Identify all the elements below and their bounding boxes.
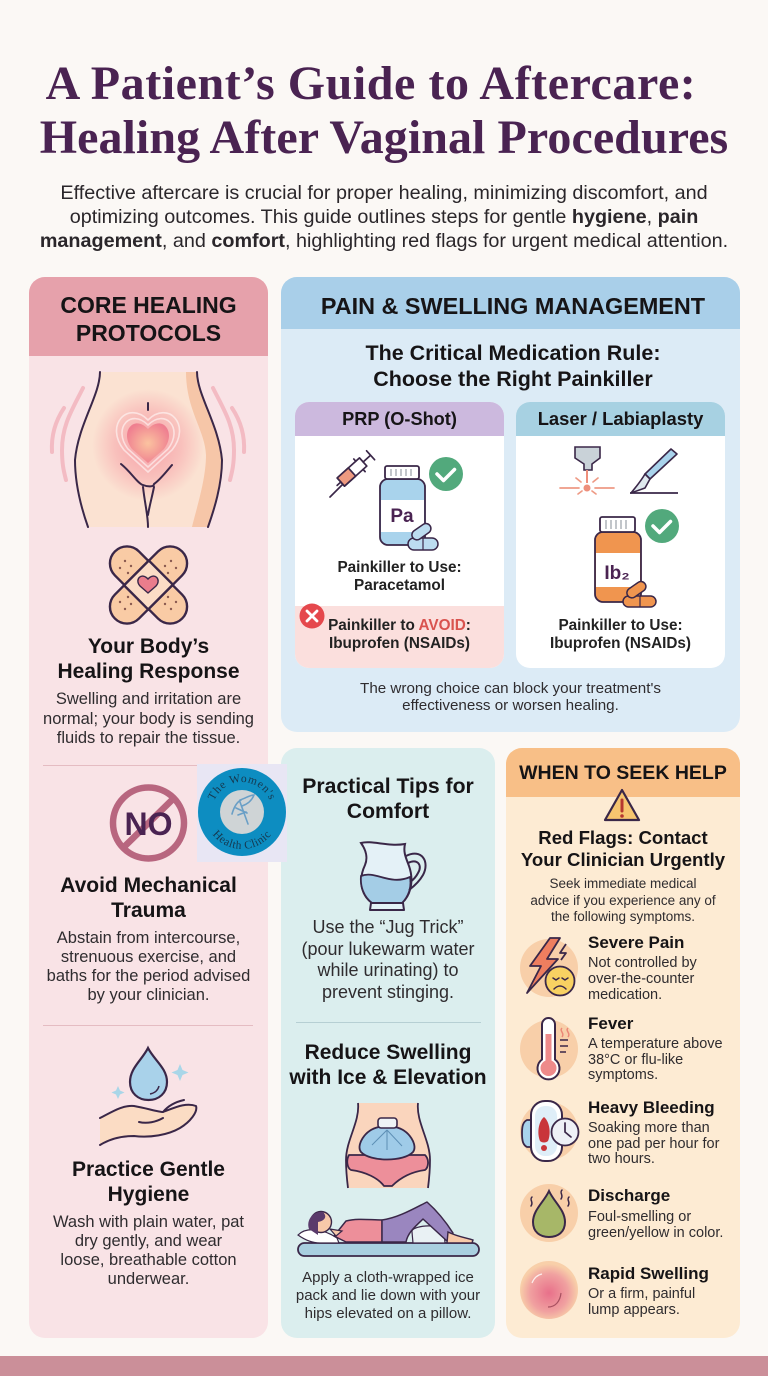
text: warning note: [360, 680, 661, 714]
icon: red cross: [300, 604, 324, 628]
heading: practice gentle hygiene: [72, 1158, 225, 1206]
heading: practical tips: Comfort: [347, 800, 429, 822]
text: seek immediate advice: Seek immediate medical: [549, 876, 697, 891]
item: heavy bleeding: [520, 1098, 580, 1164]
text: warning note: The wrong choice can block your treatment's: [360, 680, 661, 697]
text: discharge: [588, 1209, 723, 1241]
text: avoid trauma: Abstain from intercourse,: [57, 929, 240, 947]
icon: ibuprofen bottle: Ib₂: [604, 563, 630, 584]
heading: pain and swelling management: PAIN & SWELLING MANAGEMENT: [321, 293, 705, 319]
text: heavy bleeding: two hours.: [588, 1151, 655, 1167]
text: painkiller to use ibuprofen: Ibuprofen (NSAIDs): [550, 635, 691, 652]
item: rapid swelling: [520, 1261, 580, 1321]
text: avoid trauma: by your clinician.: [88, 986, 209, 1004]
text: severe pain: Not controlled by: [588, 955, 697, 971]
icon: paracetamol bottle: [379, 465, 439, 551]
text: severe pain: over-the-counter: [588, 971, 694, 987]
card: PRP: [295, 402, 504, 668]
text: severe pain: medication.: [588, 987, 662, 1003]
clinic logo: The Women's: [208, 774, 274, 800]
heading: severe pain: Severe Pain: [588, 933, 684, 952]
heading: your body's healing response: Healing Response: [57, 660, 240, 682]
text: jug trick: [301, 917, 475, 1002]
text: fever: 38°C or flu-like: [588, 1052, 683, 1068]
icon: scalpel: [630, 448, 678, 494]
heading: red flags: Your Clinician Urgently: [521, 849, 725, 870]
text: heavy bleeding: [588, 1121, 719, 1168]
heading: avoid mechanical trauma: [60, 874, 237, 922]
text: healing response: fluids to repair the tissue.: [57, 729, 240, 747]
text: discharge: Foul-smelling or: [588, 1209, 691, 1225]
text: seek immediate advice: advice if you experience any of: [530, 892, 716, 908]
footer bar: [0, 1356, 768, 1376]
text: heavy bleeding: one pad per hour for: [588, 1136, 719, 1152]
item: severe pain: [520, 937, 578, 997]
text: jug trick: prevent stinging.: [322, 982, 454, 1002]
text: jug trick: Use the “Jug Trick”: [312, 917, 464, 937]
text: painkiller to avoid: Painkiller to AVOID:: [328, 617, 471, 634]
heading: core healing protocols: PROTOCOLS: [76, 320, 221, 346]
text: healing response: normal; your body is sending: [43, 710, 254, 728]
heading: core healing protocols: [60, 292, 237, 346]
panel: pain and swelling management: [281, 277, 740, 732]
heading: critical medication rule: [365, 341, 661, 391]
heading: discharge: Discharge: [588, 1186, 670, 1205]
heading: practical tips: Practical Tips for: [302, 774, 474, 798]
item: fever: [520, 1017, 578, 1080]
icon: swollen lump: [520, 1261, 580, 1321]
text: seek immediate advice: the following symptoms.: [551, 909, 695, 924]
text: rapid swelling: Or a firm, painful: [588, 1286, 695, 1302]
heading: core healing protocols: CORE HEALING: [60, 292, 237, 318]
heading: practical tips: [302, 774, 474, 822]
icon: green check: [429, 457, 463, 491]
title: [40, 57, 728, 164]
icon: pad and clock: [520, 1098, 580, 1164]
icon: no sign: [110, 784, 188, 862]
icon: crossed bandages with heart: [108, 545, 188, 625]
text: seek immediate advice: [530, 876, 716, 924]
icon: lightning and sad face: [520, 937, 578, 997]
text: heavy bleeding: Soaking more than: [588, 1120, 710, 1136]
heading: rapid swelling: Rapid Swelling: [588, 1264, 709, 1283]
text: painkiller to avoid: Ibuprofen (NSAIDs): [329, 635, 470, 652]
heading: reduce swelling: [289, 1040, 487, 1088]
icon: ibuprofen bottle: [594, 516, 657, 608]
heading: your body's healing response: Your Body’s: [88, 634, 209, 658]
clinic logo: Health Clinic: [212, 830, 271, 849]
icon: laser: [559, 446, 615, 495]
text: ice and elevation: [296, 1269, 480, 1322]
heading: heavy bleeding: Heavy Bleeding: [588, 1098, 715, 1117]
heading: red flags: [521, 827, 725, 870]
intro text: optimizing outcomes. This guide outlines steps for gentle hygiene, pain: [70, 206, 698, 228]
icon: ice pack on abdomen: [345, 1102, 431, 1188]
text: fever: A temperature above: [588, 1036, 723, 1052]
clinic logo: [197, 764, 287, 862]
text: jug trick: while urinating) to: [317, 960, 459, 980]
heading: avoid mechanical trauma: Trauma: [111, 898, 186, 922]
icon: green check: [645, 509, 679, 543]
icon: thermometer: [520, 1018, 580, 1082]
text: warning note: effectiveness or worsen healing.: [402, 697, 619, 714]
icon: warning triangle: [604, 788, 640, 822]
text: painkiller to use paracetamol: Paracetamol: [354, 577, 445, 594]
heading: critical medication rule: Choose the Right Painkiller: [373, 367, 653, 391]
text: rapid swelling: [588, 1286, 695, 1318]
text: ice and elevation: Apply a cloth-wrapped ice: [302, 1269, 474, 1286]
heading: fever: Fever: [588, 1014, 633, 1033]
text: healing response: [43, 690, 254, 747]
icon: no sign: NO: [124, 806, 172, 842]
text: painkiller to use paracetamol: [337, 559, 462, 594]
heading: reduce swelling: Reduce Swelling: [305, 1040, 471, 1064]
heading: your body's healing response: [57, 634, 240, 682]
card: laser labiaplasty: [516, 402, 725, 668]
text: fever: [588, 1037, 723, 1084]
text: painkiller to avoid: [328, 617, 471, 652]
intro text: [40, 182, 728, 252]
text: painkiller to use ibuprofen: [550, 617, 691, 652]
text: jug trick: (pour lukewarm water: [301, 938, 475, 958]
text: avoid trauma: baths for the period advised: [47, 967, 250, 985]
title: Healing After Vaginal Procedures: [40, 111, 728, 164]
heading: laser labiaplasty: Laser / Labiaplasty: [538, 408, 703, 429]
text: gentle hygiene: dry gently, and wear: [75, 1232, 222, 1250]
text: discharge: green/yellow in color.: [588, 1225, 723, 1241]
text: fever: symptoms.: [588, 1067, 658, 1083]
text: ice and elevation: pack and lie down with your: [296, 1287, 480, 1304]
text: rapid swelling: lump appears.: [588, 1302, 680, 1318]
heading: red flags: Red Flags: Contact: [538, 827, 708, 848]
icon: paracetamol bottle: Pa: [390, 506, 414, 527]
panel: core healing protocols: [29, 277, 268, 1338]
heading: PRP: PRP (O-Shot): [342, 409, 457, 429]
text: painkiller to use paracetamol: Painkiller to Use:: [337, 559, 462, 576]
heading: when to seek help: WHEN TO SEEK HELP: [519, 762, 727, 784]
item: discharge: [520, 1184, 580, 1244]
heading: reduce swelling: with Ice & Elevation: [289, 1066, 487, 1088]
panel: when to seek help: [506, 748, 740, 1338]
panel: practical tips: [281, 748, 495, 1338]
intro text: Effective aftercare is crucial for proper healing, minimizing discomfort, and: [60, 182, 708, 204]
icon: syringe: [329, 450, 376, 498]
text: gentle hygiene: underwear.: [108, 1270, 189, 1288]
heading: practice gentle hygiene: Practice Gentle: [72, 1158, 225, 1180]
text: gentle hygiene: loose, breathable cotton: [60, 1251, 237, 1269]
heading: avoid mechanical trauma: Avoid Mechanical: [60, 874, 237, 896]
text: healing response: Swelling and irritation are: [56, 690, 241, 708]
intro text: management, and comfort, highlighting red flags for urgent medical attention.: [40, 230, 728, 252]
heading: practice gentle hygiene: Hygiene: [108, 1182, 189, 1206]
text: ice and elevation: hips elevated on a pillow.: [305, 1305, 471, 1322]
icon: water jug: [359, 841, 427, 911]
icon: green droplet: [520, 1184, 580, 1244]
text: avoid trauma: strenuous exercise, and: [61, 948, 236, 966]
text: gentle hygiene: Wash with plain water, pat: [53, 1213, 244, 1231]
text: severe pain: [588, 955, 697, 1003]
text: gentle hygiene: [53, 1213, 244, 1288]
heading: critical medication rule: The Critical Medication Rule:: [365, 341, 661, 365]
text: painkiller to use ibuprofen: Painkiller to Use:: [558, 617, 683, 634]
illustration: lower body with heart: [50, 371, 246, 528]
title: A Patient’s Guide to Aftercare:: [46, 57, 696, 110]
icon: person lying with hips elevated: [297, 1201, 480, 1257]
text: avoid trauma: [47, 929, 250, 1004]
icon: water drop over hand: [99, 1046, 198, 1146]
